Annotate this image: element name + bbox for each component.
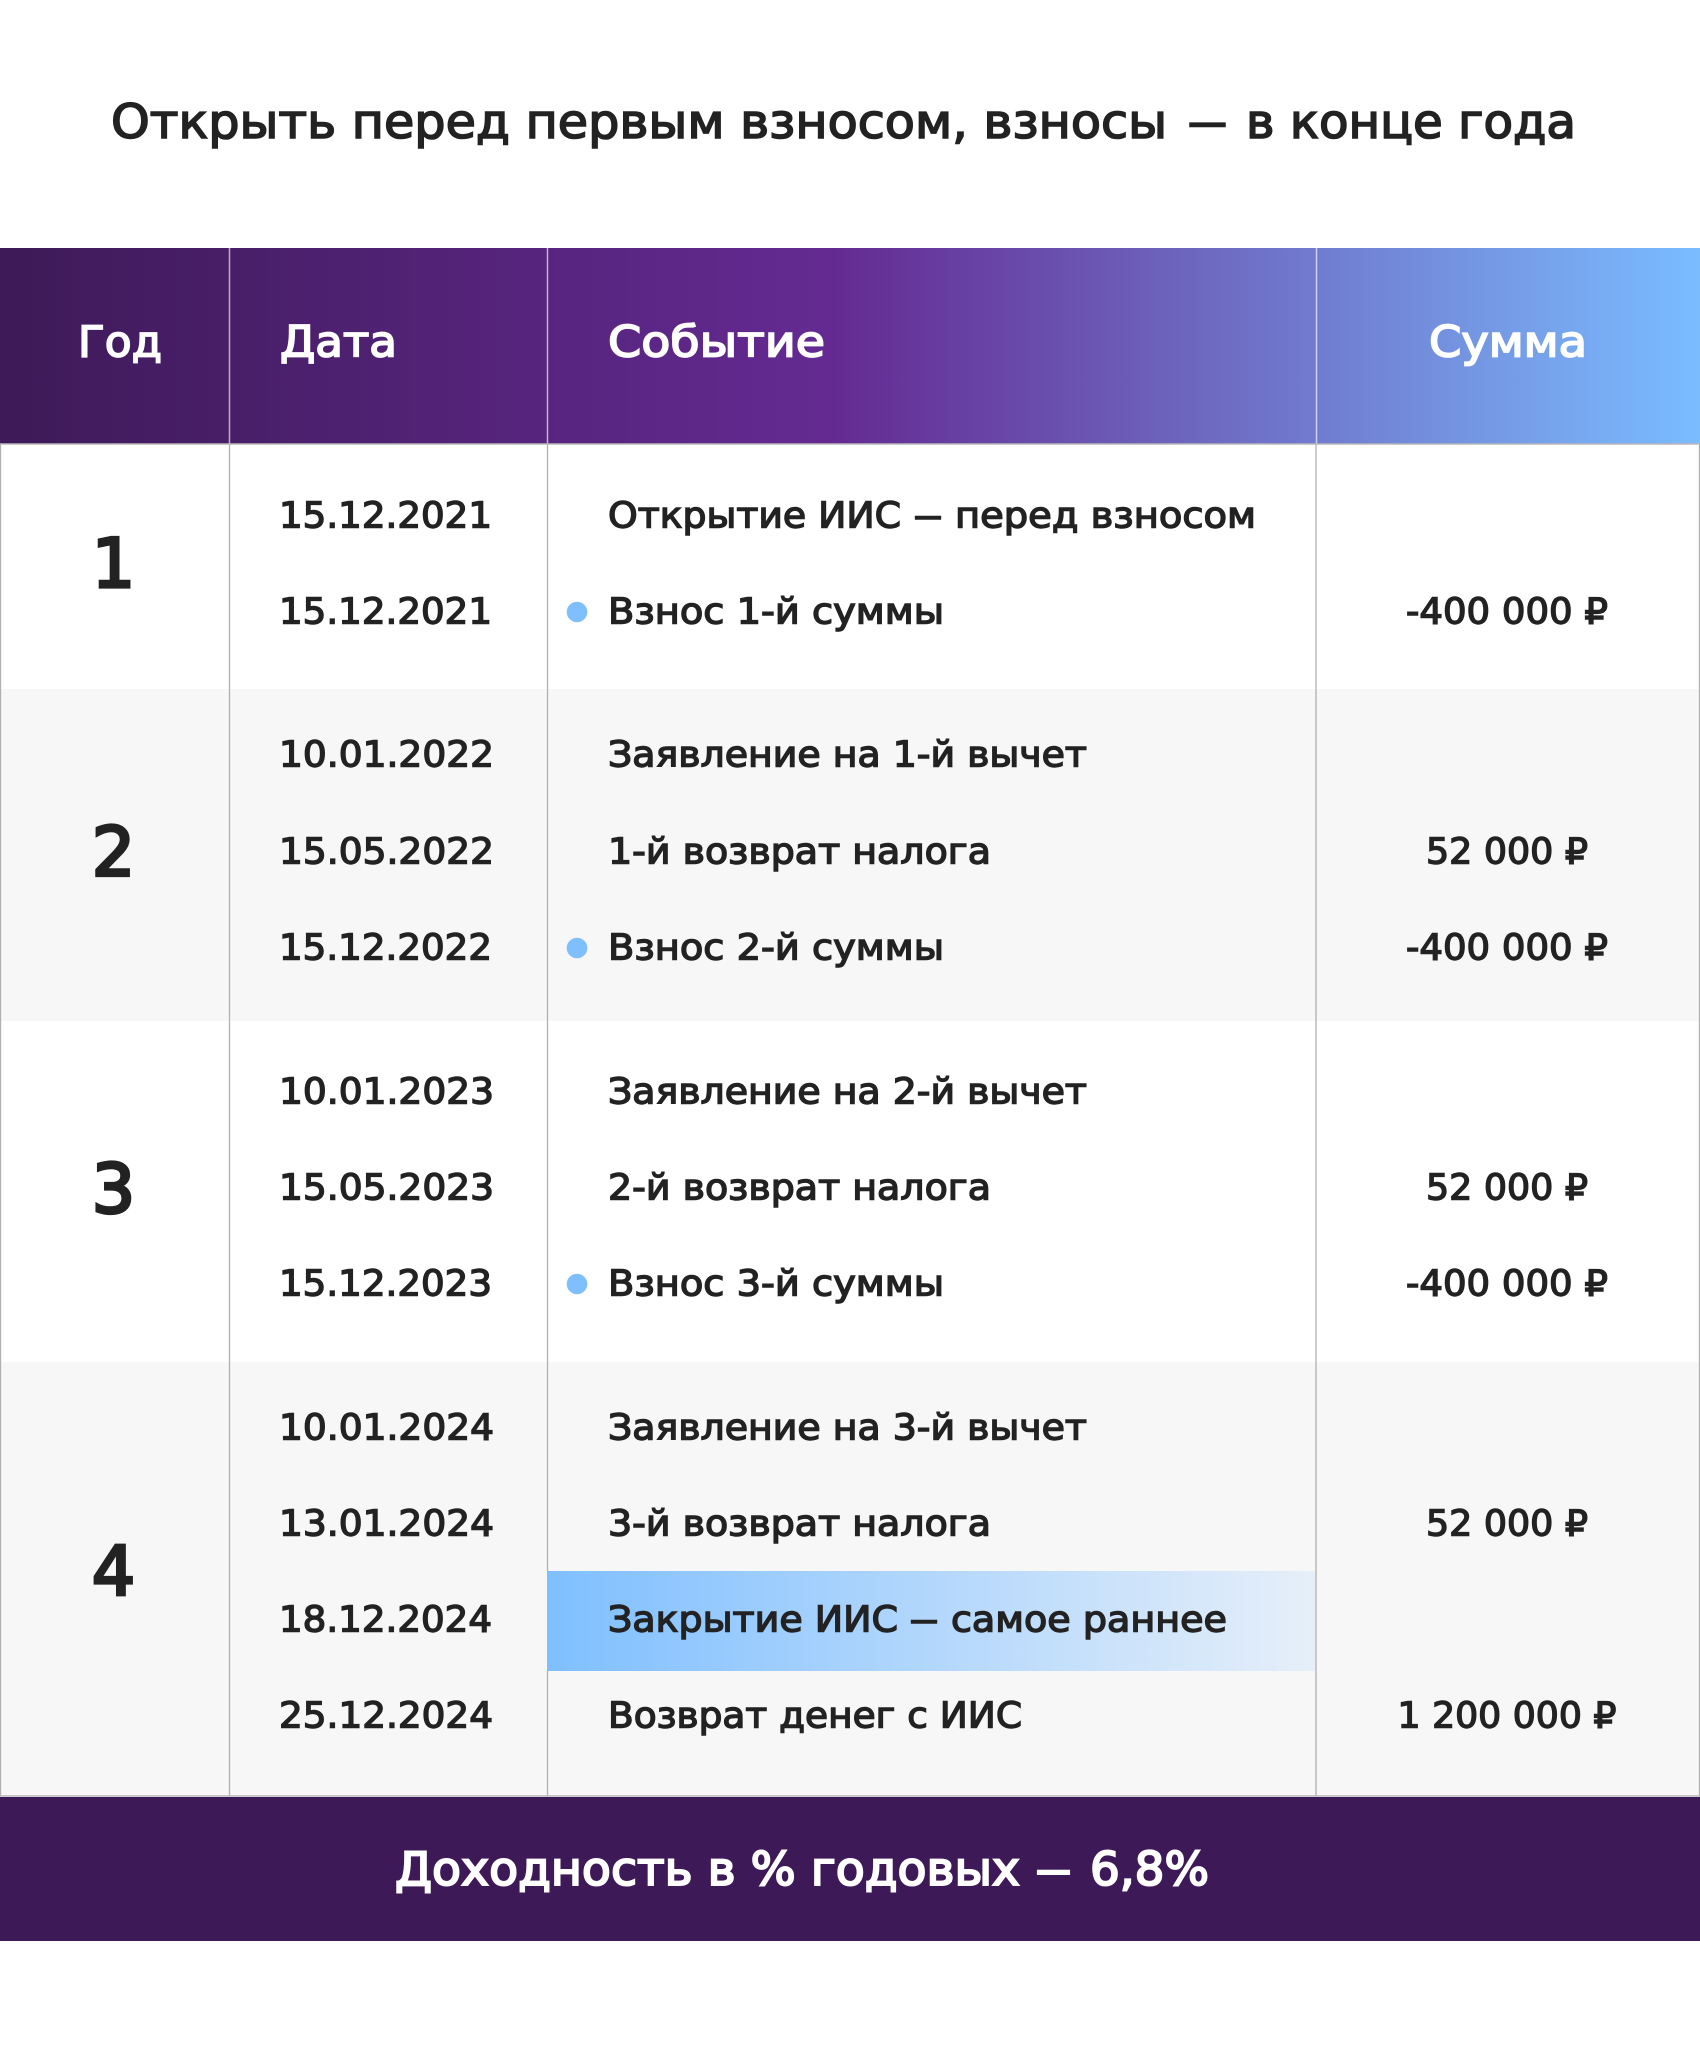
amount: 52 000 ₽ [1426,832,1588,872]
event: самое раннее [951,1600,1227,1640]
amount: 52 000 ₽ [1426,1168,1588,1208]
event: Возврат денег с ИИС [608,1696,1022,1736]
heading: year: Год [78,318,162,368]
amount: 1 200 000 ₽ [1398,1696,1616,1736]
icon: contribution dot [567,1274,587,1294]
event: 3-й возврат налога [608,1504,991,1544]
date: 25.12.2024 [279,1696,493,1736]
event: Закрытие ИИС [608,1600,898,1640]
date: 10.01.2024 [279,1408,494,1448]
date: 15.05.2022 [279,832,494,872]
event: 2-й возврат налога [608,1168,991,1208]
year number 2: 2 [92,814,135,892]
event: перед взносом [955,496,1256,536]
title: — [1188,95,1227,150]
icon: contribution dot [567,938,587,958]
footer bar [0,1797,1700,1941]
row: year 1 [92,496,1608,632]
event: 1-й возврат налога [608,832,991,872]
heading: event: Событие [608,318,825,368]
event [608,496,1256,536]
amount: -400 000 ₽ [1406,1264,1608,1304]
date: 15.12.2023 [279,1264,492,1304]
event [608,1600,1227,1640]
event: Взнос 2-й суммы [608,928,944,968]
heading: amount: Сумма [1429,318,1587,368]
event: Заявление на 3-й вычет [608,1408,1087,1448]
date: 13.01.2024 [279,1504,494,1544]
amount: 52 000 ₽ [1426,1504,1588,1544]
icon: contribution dot [567,602,587,622]
date: 18.12.2024 [279,1600,492,1640]
title [111,95,1576,150]
event: Заявление на 2-й вычет [608,1072,1087,1112]
year number 3: 3 [92,1150,135,1230]
year number 4: 4 [92,1532,135,1612]
date: 15.12.2021 [279,592,492,632]
year number 1: 1 [92,525,135,604]
row backgrounds [0,689,1700,1796]
title: Открыть перед первым взносом, взносы [111,95,1167,150]
footer text: — [1036,1842,1071,1896]
event: — [910,1600,938,1640]
footer text: Доходность в % годовых [395,1842,1020,1896]
event: Взнос 1-й суммы [608,592,944,632]
event: Заявление на 1-й вычет [608,734,1087,776]
row: year 2 [92,734,1608,968]
date: 10.01.2023 [279,1072,494,1112]
date: 10.01.2022 [279,734,494,776]
row: year 4 [92,1408,1616,1736]
date: 15.12.2022 [279,928,492,968]
date: 15.05.2023 [279,1168,494,1208]
table header [0,248,1700,444]
heading: date: Дата [280,318,397,368]
title: в конце года [1246,95,1576,150]
date: 15.12.2021 [279,496,492,536]
event: — [914,496,942,536]
footer text: 6,8% [1090,1842,1209,1896]
amount: -400 000 ₽ [1406,928,1608,968]
highlight: closing the account [547,1571,1315,1671]
row: year 3 [92,1072,1608,1304]
event: Взнос 3-й суммы [608,1264,944,1304]
event: Открытие ИИС [608,496,901,536]
amount: -400 000 ₽ [1406,592,1608,632]
